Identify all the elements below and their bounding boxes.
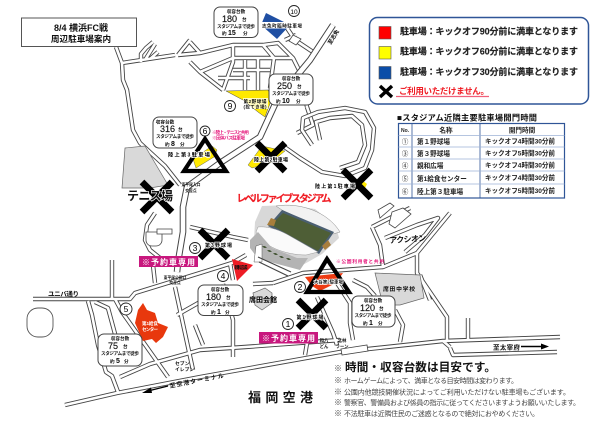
parking: red shinwa plaza: 親和広場	[234, 264, 248, 271]
footnotes: 公園内他競技開催状況によってご利用いただけない駐車場もございます。	[344, 388, 570, 396]
road labels: 北林	[338, 337, 347, 344]
closed mark: tennis: テニス場	[127, 188, 173, 203]
capacity box: 75	[98, 334, 142, 366]
table row 6	[402, 186, 555, 196]
road labels: どん	[320, 343, 329, 350]
capacity box: 180 south	[198, 285, 243, 316]
capacity box: 250: 分	[296, 98, 301, 105]
capacity box: 316: 収容台数	[156, 118, 175, 126]
tennis court area	[122, 146, 168, 188]
parking: red first food center: センター	[142, 326, 158, 333]
parking: yellow athletics 1	[358, 180, 367, 188]
parking: red otani	[305, 273, 343, 291]
capacity box: 250: スタジアムまで徒歩	[272, 90, 310, 97]
table row 1: キックオフ4時間30分前	[485, 136, 555, 146]
capacity box: Shime: 15	[228, 30, 236, 37]
table row 3: ③	[402, 150, 409, 158]
capacity box: 250: 収容台数	[282, 75, 301, 82]
circled numbers: 5	[124, 304, 129, 314]
table row 1: 第１野球場	[417, 137, 450, 146]
closed mark: first baseball	[296, 300, 326, 328]
capacity box: 180 south: 収容台数	[211, 286, 230, 293]
stadium	[250, 205, 340, 276]
road labels: 交差点	[169, 280, 181, 285]
legend row: yellow	[379, 46, 578, 59]
legend row: red	[379, 26, 578, 39]
note: shared with athletics: ※団体バス駐車場	[212, 134, 245, 142]
footnotes: ※	[334, 364, 342, 373]
capacity box: 75: 75	[108, 341, 118, 351]
capacity box: 75: 約	[110, 358, 115, 365]
footnotes: 不法駐車は近隣住民のご迷惑となるので絶対におやめください。	[344, 409, 539, 418]
footnotes: ホームゲームによって、満車となる目安時間は変わります。	[344, 376, 518, 385]
circled numbers: 3	[193, 243, 198, 253]
capacity box: 120: 収容台数	[364, 297, 383, 304]
table row 3	[402, 148, 555, 158]
table row 5: 第1給食センター	[417, 174, 467, 183]
triangle mark: otani 2	[307, 259, 349, 292]
note: shared with athletics	[212, 129, 249, 142]
hall: 席田会館	[249, 295, 277, 304]
capacity box: 120: 120	[360, 303, 375, 313]
capacity box: Shime: 約	[222, 30, 227, 37]
triangle mark: otani 2: 大谷第2駐車場	[314, 278, 343, 286]
triangle mark: athletics 3	[168, 139, 226, 171]
title box: 周辺駐車場案内	[51, 33, 111, 44]
note: shared with athletics: ※陸上・テニスと共用	[212, 129, 249, 136]
arrow to Dazaifu	[493, 342, 549, 352]
title box: 8/4 横浜FC戦	[54, 22, 108, 33]
capacity box: 316: 316	[160, 124, 175, 134]
arrow to airport terminal	[142, 372, 224, 393]
capacity box: 250: 約	[276, 98, 281, 105]
road labels	[48, 182, 349, 373]
road labels: ユニバ通り	[48, 289, 79, 298]
capacity box: 180 south: 1	[217, 309, 221, 316]
footnotes: ※	[334, 398, 342, 407]
table row 4: ④	[402, 162, 409, 170]
capacity box: 250	[269, 74, 313, 105]
table row 1	[402, 136, 555, 146]
closed mark: athletics 1: 陸上第1駐車場	[315, 183, 355, 190]
footnotes: 警察官、警備員および係員の指示に従ってくださいますようお願いいたします。	[344, 398, 580, 407]
parking: yellow second baseball: 第2野球場	[244, 98, 267, 105]
capacity box: 250: 250	[277, 81, 292, 91]
table row 6: 陸上第３駐車場	[417, 187, 464, 196]
table row 3: 第３野球場	[417, 149, 450, 158]
circled numbers: 9	[228, 101, 233, 111]
capacity box: Shime: 分	[243, 30, 248, 37]
road labels: 交差点	[185, 188, 197, 193]
legend row: blue: 駐車場：キックオフ30分前に満車となります	[400, 66, 578, 77]
footnotes: 時間・収容台数は目安です。	[345, 360, 496, 374]
table row 1: ①	[402, 138, 409, 146]
note: shared with park users: ※公園利用者と共用	[336, 258, 384, 265]
road labels: ラーン	[336, 344, 349, 350]
capacity box: 180 south: 台	[226, 294, 231, 301]
capacity box: 75: スタジアムまで徒歩	[101, 350, 139, 357]
circled numbers: 6	[203, 126, 208, 136]
table row 6: キックオフ5時間30分前	[485, 186, 555, 195]
capacity box: 250: 10	[282, 98, 290, 105]
table row 3: キックオフ5時間30分前	[485, 148, 555, 158]
capacity box: 180 south: 約	[211, 309, 216, 316]
road labels: セブン	[175, 360, 190, 367]
capacity box: Shime: スタジアムまで徒歩	[217, 23, 255, 30]
parking: red first food center	[135, 303, 168, 343]
opening times table: No.	[401, 128, 410, 134]
legend row: yellow: 駐車場：キックオフ60分前に満車となります	[400, 46, 578, 56]
table row 4: 親和広場	[417, 161, 444, 170]
parking: red first food center: 第1給食	[142, 320, 158, 327]
capacity box: 75: 分	[124, 358, 129, 365]
road label: shime: 至志免	[326, 27, 341, 46]
capacity box: 316: 台	[178, 126, 183, 133]
closed mark: first baseball: 第1野球場	[296, 314, 324, 321]
opening times table: 開門時間	[509, 126, 536, 134]
baseball ground outline	[27, 308, 53, 337]
table row 4	[402, 160, 555, 170]
footnotes: ※	[334, 388, 342, 396]
parking: yellow athletics 2	[248, 146, 285, 168]
table row 5	[402, 173, 555, 183]
triangle mark: athletics 3: 陸上第3駐車場	[168, 150, 211, 158]
capacity box: 316: スタジアムまで徒歩	[156, 133, 194, 140]
table row 4: キックオフ4時間30分前	[485, 160, 555, 170]
closed mark: athletics 1	[315, 170, 371, 198]
tag: reservation only south: ※予約車専用	[262, 333, 315, 343]
title box	[22, 18, 136, 46]
capacity box: 316	[153, 117, 197, 148]
road labels: 東平尾入口	[182, 182, 201, 187]
closed mark: tennis	[127, 182, 173, 212]
parking: yellow second baseball	[226, 90, 272, 117]
road labels: 和八	[320, 337, 329, 344]
capacity box: 180 south: 180	[206, 292, 221, 302]
parking: red shinwa plaza	[232, 259, 253, 281]
stadium name: レベルファイブスタジアム	[236, 192, 332, 205]
closed mark: third baseball: 第3野球場	[205, 242, 232, 249]
footnotes: ※	[334, 376, 342, 385]
parking: blue temporary lot	[261, 13, 303, 39]
capacity box: Shime: 収容台数	[227, 8, 246, 15]
capacity box: 316: 8	[171, 141, 175, 148]
road labels: イレブン	[175, 366, 194, 373]
table row 5: ⑤	[402, 175, 409, 183]
capacity box: 316: 分	[180, 141, 185, 148]
table row 5: キックオフ4時間30分前	[485, 173, 555, 182]
opening times table: 名称	[439, 126, 453, 134]
capacity box: 120: 分	[378, 320, 383, 327]
capacity box: 75: 5	[116, 358, 120, 365]
legend row: red: 駐車場：キックオフ90分前に満車となります	[400, 26, 578, 36]
arrow to airport terminal: 至空港ターミナル	[169, 372, 224, 390]
circled numbers: 10	[290, 9, 298, 16]
arrow to Dazaifu: 至太宰府	[493, 342, 520, 352]
capacity box: Shime: 180	[222, 14, 237, 24]
road labels: 東平尾公園口	[164, 275, 187, 280]
parking: yellow second baseball: (投てき場)	[244, 104, 267, 110]
capacity box: 180 south: スタジアムまで徒歩	[201, 301, 239, 308]
footnotes	[334, 360, 580, 418]
hall	[249, 288, 277, 310]
capacity box: 120: 1	[369, 320, 373, 327]
capacity box: 75: 台	[123, 343, 128, 350]
capacity box: Shime	[214, 7, 258, 38]
capacity box: 120: スタジアムまで徒歩	[354, 312, 392, 319]
circled numbers: 4	[221, 271, 226, 281]
capacity box: 120	[352, 296, 395, 327]
capacity box: 120: 約	[363, 320, 368, 327]
legend	[370, 18, 588, 104]
legend row: blue	[379, 66, 578, 79]
airport label: 福岡空港	[248, 390, 313, 405]
opening times title: ■スタジアム近隣主要駐車場開門時間	[397, 112, 537, 122]
tag: reservation only west: ※予約車専用	[142, 257, 195, 267]
capacity box: 316: 約	[165, 141, 170, 148]
circled numbers	[120, 6, 306, 330]
legend row: not available: ご利用いただけません。	[399, 86, 489, 96]
road network	[33, 25, 560, 405]
circled numbers: 1	[286, 319, 291, 329]
school	[375, 273, 424, 305]
parking: yellow athletics 3	[193, 146, 217, 168]
parking: blue temporary lot: 志免町臨時駐車場	[262, 22, 302, 29]
closed mark: third baseball	[200, 230, 232, 258]
capacity box: 180 south: 分	[225, 309, 230, 316]
table row 6: ⑥	[402, 188, 409, 196]
closed mark: athletics 2: 陸上第2駐車場	[254, 156, 288, 164]
closed mark: athletics 2	[254, 143, 288, 171]
capacity box: Shime: 台	[242, 16, 247, 23]
action label: アクシオン	[389, 233, 427, 245]
circled numbers: 2	[298, 282, 303, 292]
opening times table	[398, 124, 564, 198]
school: 席田中学校	[383, 285, 415, 293]
footnotes: ※	[334, 409, 342, 418]
capacity box: 120: 台	[379, 305, 384, 312]
capacity box: 250: 台	[297, 83, 302, 90]
capacity box: 75: 収容台数	[111, 335, 130, 342]
